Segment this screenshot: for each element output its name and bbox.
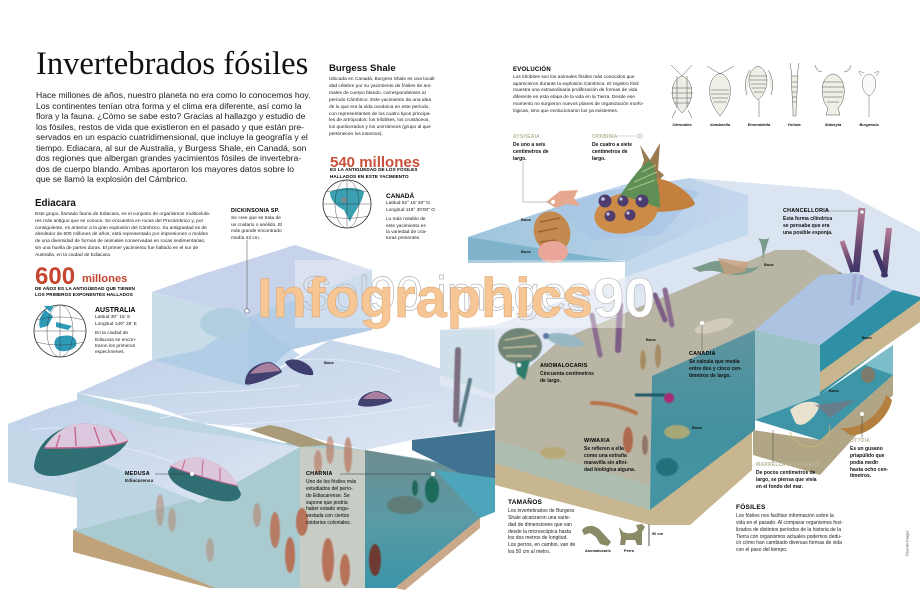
- label: Aysheaia: [513, 134, 549, 162]
- label: Chancelloria: CHANCELLORIA: [783, 208, 829, 214]
- intro text: flora y la fauna. ¿Cómo se sabe esto? Gracias al hallazgo y estudio de: [36, 111, 305, 121]
- aysheaia creatures: [523, 161, 580, 263]
- top block with Dickinsonia: [152, 245, 372, 387]
- label: Canadá: [386, 192, 435, 241]
- mouth labels: Boca: [324, 360, 334, 365]
- label: Marrella: largo, se piensa que vivía: [756, 477, 817, 483]
- text: Tamaños: los 50 cm al metro.: [508, 549, 550, 555]
- mouth labels: Boca: [646, 337, 656, 342]
- label: Canadá: Latitud 52° 15' 30" N: [386, 201, 430, 206]
- intro text: [36, 90, 311, 184]
- floor creatures: [540, 344, 690, 476]
- stat: 540 millones: [330, 154, 420, 179]
- text: Ediacara: Australia, en la ciudad de Ediacara.: [35, 253, 111, 258]
- label: Charnia: vestada con ciertos: [306, 513, 349, 519]
- label: Canadá: Longitud 116° 30'00" O: [386, 208, 435, 213]
- fossil names: Yohoia: [787, 122, 801, 127]
- label: Australia: traron los primeros: [95, 344, 135, 349]
- text: Evolución: aparecieron durante la explosión Cámbrica. El registro fósil: [513, 82, 639, 87]
- text: Tamaños: TAMAÑOS: [508, 499, 542, 506]
- label: Ottoia: priapúlido que: [850, 453, 884, 459]
- text: Evolución: muestra una extraordinaria proliferación de formas de vida: [513, 88, 637, 93]
- size label: 50 cm: [652, 531, 663, 536]
- label: Charnia: estudiados del perío-: [306, 486, 353, 492]
- text: Burgess Shale: período Cámbrico. Este yacimiento da una idea: [329, 98, 431, 103]
- label: Australia: En la ciudad de: [95, 331, 128, 336]
- text: Fósiles: cir cómo han cambiado diversas formas de vida: [736, 540, 842, 546]
- text: Burgess Shale: Ubicada en Canadá, Burgess Shale es una locali-: [329, 77, 436, 82]
- text: Tamaños: Los perros, en cambio, van de: [508, 542, 575, 548]
- text: Ediacara: [35, 212, 210, 258]
- mouth labels: Boca: [862, 335, 872, 340]
- title: Invertebrados fósiles: [36, 46, 308, 82]
- label: Ottoia: Es un gusano: [850, 446, 883, 452]
- label: Wiwaxia: WIWAXIA: [584, 438, 610, 444]
- seafloor right: [495, 250, 850, 525]
- label: Canadia: CANADIA: [689, 351, 716, 357]
- text: Burgess Shale: los quelicerados y los unirrámeos (grupo al que: [329, 125, 431, 130]
- label: Charnia: haber estado engu-: [306, 506, 349, 512]
- text: Ediacara: Este grupo, llamado fauna de Ediacara, es el conjunto de organismos multicelula-: [35, 212, 210, 217]
- text: Burgess Shale: dad célebre por su yacimiento de fósiles de ani-: [329, 84, 432, 89]
- mouth labels: Boca: [692, 425, 702, 430]
- label: Charnia: cnidarios coloniales.: [306, 520, 351, 526]
- stat: 540 millones: 540 millones: [330, 154, 420, 170]
- label: Dickinsonia: Se cree que se trata de: [231, 216, 281, 221]
- text: Burgess Shale: de lo que era la vida oceánica en este período,: [329, 105, 430, 110]
- label: Medusa: MEDUSA: [125, 471, 150, 477]
- stat: 540 millones: HALLADOS EN ESTE YACIMIENTO: [330, 174, 409, 179]
- label: Charnia: [306, 471, 356, 526]
- label: Aysheaia: De uno a seis: [513, 142, 545, 148]
- fossil names: Sidneyia: [825, 122, 841, 127]
- globe: Australia: [34, 305, 86, 357]
- label: Wiwaxia: maravilla sin afini-: [584, 460, 628, 466]
- label: Australia: especímenes.: [95, 350, 125, 355]
- label: Ottoia: [850, 438, 888, 479]
- fossil: Olenoides: [671, 65, 693, 118]
- heading: Burgess Shale: Burgess Shale: [329, 63, 396, 74]
- watermark: Infographics90: [257, 266, 655, 329]
- label: Chancelloria: se pensaba que era: [783, 223, 829, 229]
- text: Evolución: [513, 65, 644, 114]
- label: Australia: AUSTRALIA: [95, 307, 135, 314]
- label: Dickinsonia: [231, 208, 282, 241]
- text: Evolución: diferente en esta etapa de la vida en la Tierra. Desde ese: [513, 95, 635, 100]
- text: Tamaños: Los invertebrados de Burgess: [508, 508, 574, 514]
- label: Dickinsonia: DICKINSONIA SP.: [231, 208, 280, 214]
- label: Ottoia: OTTOIA: [850, 438, 870, 444]
- text: Tamaños: los dos metros de longitud.: [508, 535, 568, 541]
- label: Aysheaia: largo.: [513, 156, 527, 162]
- text: Fósiles: [736, 503, 843, 553]
- intro text: los fósiles, restos de vida que existieron en el pasado y que están pre-: [36, 122, 304, 132]
- silhouette labels: [585, 548, 634, 553]
- label: Australia: Longitud 149° 28' E: [95, 322, 137, 327]
- text: Evolución: momento no surgieron nuevos planes de organización morfo-: [513, 102, 644, 107]
- label: Chancelloria: Esta forma cilíndrica: [783, 216, 832, 222]
- text: Burgess Shale: les de artrópodos: los trilobites, los crustáceos,: [329, 118, 430, 123]
- label: Anomalocaris: [540, 363, 594, 384]
- label: Opabinia: De cuatro a siete: [592, 142, 632, 148]
- stat: 540 millones: ES LA ANTIGÜEDAD DE LOS FÓSILES: [330, 167, 418, 172]
- label: Opabinia: [592, 134, 632, 162]
- upper right block: [468, 178, 748, 277]
- label: Canadá: Lo más notable de: [386, 217, 425, 222]
- label: Charnia: CHARNIA: [306, 471, 333, 477]
- water volume left: [8, 340, 495, 530]
- mouth labels: Boca: [829, 388, 839, 393]
- fossil names: [672, 122, 879, 127]
- text: Fósiles: vida en el pasado. Al comparar organismos fosi-: [736, 520, 843, 526]
- intro text: Los continentes tenían otra forma y el clima era diferente, así como la: [36, 100, 302, 110]
- fossil: Emeraldella: [745, 66, 773, 117]
- small medusas: [245, 359, 392, 407]
- label: Anomalocaris: ANOMALOCARIS: [540, 363, 588, 369]
- label: Dickinsonia: más grande encontrado: [231, 229, 282, 234]
- text: Evolución: Los trilobites son los animales fósiles más conocidos que: [513, 75, 635, 80]
- label: Dickinsonia: un cnidario o anélido. El: [231, 223, 282, 228]
- fossil: Burgessia: [859, 71, 879, 117]
- dickinsonia: [200, 240, 250, 338]
- mouth labels: Boca: [521, 249, 531, 254]
- label: Australia: Ediacara se encon-: [95, 338, 136, 343]
- medusa: [168, 457, 241, 501]
- silhouettes: anomalocaris and dog: [582, 524, 650, 546]
- watermark: Sol90 images: [300, 268, 591, 321]
- label: Chancelloria: [783, 208, 832, 236]
- label: Marrella: [756, 462, 819, 490]
- fossil: Xandarella: [707, 66, 734, 116]
- label: Canadá: CANADÁ: [386, 193, 414, 200]
- silhouette labels: Perro: [624, 548, 634, 553]
- stat: 600 millones: LOS PRIMEROS EXPONENTES HALLADOS: [35, 292, 133, 297]
- label: Canadia: Se calcula que medía: [689, 359, 740, 365]
- fossil names: Burgessia: [859, 122, 879, 127]
- globe: Canada: [323, 180, 371, 228]
- text: Tamaños: [508, 498, 576, 555]
- label lines: [155, 472, 435, 476]
- label: Marrella: en el fondo del mar.: [756, 484, 803, 490]
- text: Evolución: EVOLUCIÓN: [513, 67, 551, 73]
- label: Opabinia: centímetros de: [592, 149, 628, 155]
- text: Fósiles: FÓSILES: [736, 504, 766, 511]
- intro text: Hace millones de años, nuestro planeta no era como lo conocemos hoy.: [36, 90, 311, 100]
- text: Tamaños: Shale alcanzaron una varie-: [508, 515, 570, 521]
- stat: 600 millones: 600: [35, 263, 75, 290]
- label: Medusa: [125, 471, 154, 484]
- label: Anomalocaris: Cincuenta centímetros: [540, 371, 594, 377]
- pale water plane right: [440, 178, 920, 400]
- text: Ediacara: de una diversidad de formas de animales conservadas en rocas sedimentarias,: [35, 239, 205, 244]
- anomalocaris: [498, 328, 585, 380]
- text: Fósiles: Los fósiles nos facilitan información sobre la: [736, 513, 834, 519]
- heading: Ediacara: Ediacara: [35, 198, 76, 209]
- right block: [753, 273, 920, 475]
- opabinia: [591, 134, 695, 239]
- label: Anomalocaris: de largo.: [540, 378, 561, 384]
- label: Dickinsonia: medía 43 cm.: [231, 236, 260, 241]
- fossil: Yohoia: [790, 63, 799, 116]
- label: Ottoia: hasta ocho cen-: [850, 467, 888, 473]
- fossil names: Olenoides: [672, 122, 692, 127]
- label: Charnia: do Ediacarense. Se: [306, 493, 350, 499]
- label: Chancelloria: una posible esponja.: [783, 230, 832, 236]
- silhouette labels: Anomalocaris: [585, 548, 611, 553]
- label: Charnia: supone que podría: [306, 500, 348, 506]
- mouth labels: [324, 217, 872, 430]
- seaweed charnia: [156, 436, 439, 586]
- intro text: tiempo. Ediacara, al sur de Australia, y Burgess Shale, en Canadá, son: [36, 142, 306, 152]
- label: Australia: [95, 307, 137, 355]
- marrella and ottoia: [771, 367, 892, 463]
- label: Canadá: la variedad de cria-: [386, 230, 427, 235]
- text: Burgess Shale: con representantes de los cuatro tipos principa-: [329, 112, 431, 117]
- text: Burgess Shale: pertenecen los insectos).: [329, 132, 383, 137]
- text: Tamaños: dad de dimensiones que van: [508, 522, 572, 528]
- intro text: dos de cuerpo blando. Ambas aportaron los mayores datos sobre lo: [36, 164, 294, 174]
- creature near Boca: [692, 235, 770, 275]
- label: Ottoia: tímetros.: [850, 473, 871, 479]
- stat: 600 millones: [35, 263, 135, 297]
- text: Fósiles: Tierra con organismos actuales podemos dedu-: [736, 534, 842, 540]
- canadia worm: [693, 315, 735, 352]
- fossil names: Emeraldella: [748, 122, 770, 127]
- text: Evolución: lógicas, sino que evolucionaron los ya existentes.: [513, 109, 618, 114]
- purple sponges mid: [456, 290, 672, 425]
- block: Ediacara seafloor: [73, 430, 495, 590]
- label: Wiwaxia: como una extraña: [584, 453, 627, 459]
- medusa large: [34, 423, 128, 476]
- label: Opabinia: OPABINIA: [592, 134, 618, 140]
- label: Aysheaia: AYSHEAIA: [513, 134, 540, 140]
- label: Wiwaxia: dad biológica alguna.: [584, 467, 635, 473]
- label: Canadia: [689, 351, 742, 379]
- text: Ediacara: res más antiguo que se conoce. Se encuentra en rocas del Precámbrico y, por: [35, 219, 203, 224]
- text: Ediacara: alrededor de 600 millones de años; está representado por impresiones o moldes: [35, 232, 208, 237]
- label: Australia: Latitud 30° 15' S: [95, 315, 130, 320]
- chancelloria sponge: [825, 208, 889, 305]
- intro text: que se llamó la explosión del Cámbrico.: [36, 174, 188, 184]
- text: Ediacara: sin una huella de partes duras. El primer yacimiento fue hallado en el sur de: [35, 246, 198, 251]
- stat: 600 millones: DE AÑOS ES LA ANTIGÜEDAD QUE TIENEN: [35, 286, 135, 290]
- label: Ottoia: podía medir: [850, 460, 878, 466]
- label: Wiwaxia: [584, 438, 635, 473]
- fossil: Sidneyia: [815, 65, 851, 115]
- stat: 600 millones: millones: [82, 273, 127, 285]
- label: Medusa: Ediacarensa: [125, 479, 153, 484]
- text: Fósiles: con el paso del tiempo.: [736, 547, 787, 553]
- label: Aysheaia: centímetros de: [513, 149, 549, 155]
- intro text: servados en un espacio cuatridimensional, que incluye la geografía y el: [36, 132, 308, 142]
- text: Tamaños: desde la microscópica hasta: [508, 529, 571, 535]
- credit: ©Sol 90 Images: [905, 531, 909, 556]
- text: Burgess Shale: [329, 76, 436, 137]
- label: Canadá: turas presentes.: [386, 236, 420, 241]
- mouth labels: Boca: [521, 217, 531, 222]
- label: Canadia: entre dos y cinco cen-: [689, 366, 742, 372]
- text: Ediacara: consiguiente, es anterior a la gran explosión del Cámbrico. Su antigüedad es de: [35, 226, 207, 231]
- mouth labels: Boca: [764, 262, 774, 267]
- text: Fósiles: lizados de distintos períodos de la historia de la: [736, 527, 841, 533]
- label: Canadá: este yacimiento es: [386, 224, 426, 229]
- label: Canadia: tímetros de largo.: [689, 373, 731, 379]
- fossil names: Xandarella: [710, 122, 730, 127]
- label: Opabinia: largo.: [592, 156, 606, 162]
- label: Wiwaxia: Se refieren a ella: [584, 446, 624, 452]
- label: Charnia: Uno de los fósiles más: [306, 479, 356, 485]
- label: Marrella: De pocos centímetros de: [756, 470, 815, 476]
- label: Marrella: MARRELLA SPLENDENS: [756, 462, 819, 468]
- text: Burgess Shale: males de cuerpo blando, correspondientes al: [329, 91, 426, 96]
- intro text: dos regiones que albergan grandes yacimientos fósiles de invertebra-: [36, 153, 301, 163]
